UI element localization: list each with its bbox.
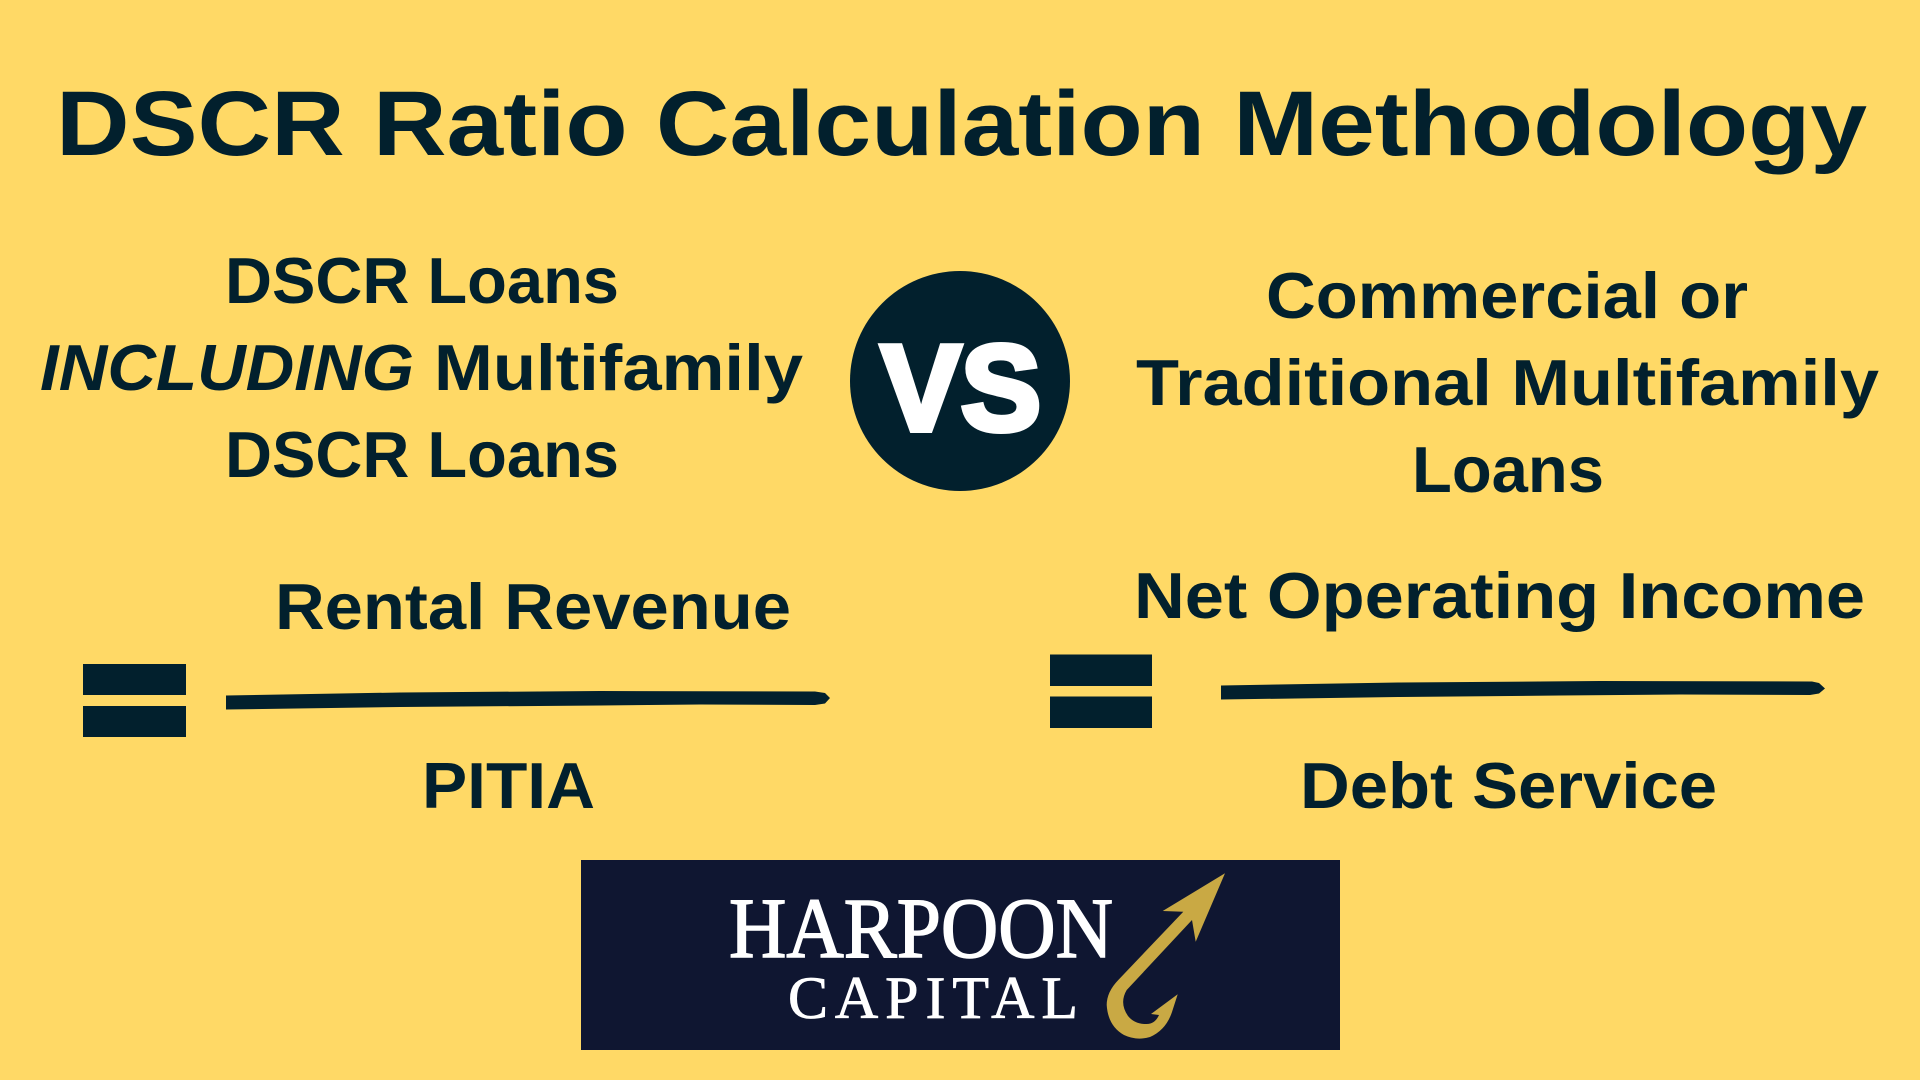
logo wordmark: CAPITAL: CAPITAL	[788, 965, 1078, 1031]
icon: VS badge: VS	[881, 320, 1041, 456]
icon: VS badge	[850, 271, 1070, 491]
heading line: traditional multifamily: Traditional Multifamily	[1136, 346, 1879, 419]
denominator: debt service: Debt Service	[1300, 749, 1717, 822]
heading line: loans: Loans	[1412, 433, 1604, 506]
heading line: commercial or: Commercial or	[1266, 259, 1748, 332]
icon: equals sign right	[1050, 654, 1152, 728]
panel: left formula	[83, 570, 830, 822]
heading line: DSCR Loans: DSCR Loans	[225, 244, 619, 317]
numerator: rental revenue: Rental Revenue	[275, 570, 791, 643]
icon: gold harpoon hook	[1107, 873, 1225, 1039]
heading line: multifamily: Multifamily	[434, 331, 803, 404]
fraction bar right	[1221, 681, 1825, 700]
denominator: PITIA: PITIA	[422, 749, 595, 822]
title: DSCR Ratio Calculation Methodology	[56, 73, 1867, 175]
logo: Harpoon Capital	[581, 860, 1340, 1050]
numerator: net operating income: Net Operating Income	[1134, 559, 1865, 632]
heading line: DSCR Loans second: DSCR Loans	[225, 418, 619, 491]
panel: right heading, commercial loans	[1136, 259, 1879, 506]
fraction bar left	[226, 691, 830, 710]
panel: left heading, DSCR loans	[40, 244, 803, 491]
heading line: including: INCLUDING	[40, 331, 414, 404]
panel: right formula	[1050, 559, 1865, 822]
logo wordmark: HARPOON: HARPOON	[729, 880, 1113, 976]
icon: equals sign left	[83, 664, 186, 737]
